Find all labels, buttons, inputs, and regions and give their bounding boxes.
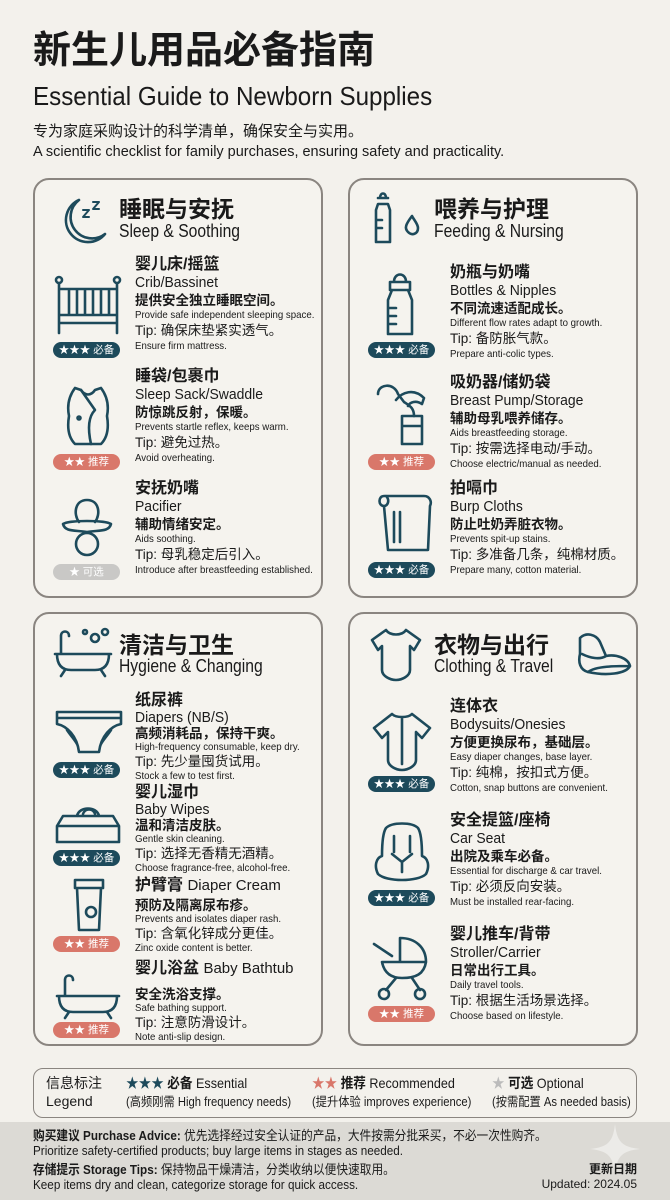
item: breast pump bbox=[368, 373, 601, 470]
panel: sleep: Tip: 母乳稳定后引入。 bbox=[135, 547, 269, 562]
panel: hygiene: Tip: 选择无香精无酒精。 bbox=[135, 846, 282, 861]
badge: bathtub: ★★ 推荐 bbox=[64, 1024, 109, 1036]
panel: feeding: ★★★ 必备 bbox=[374, 564, 429, 576]
icon: sparkle bbox=[592, 1126, 638, 1172]
panel: sleep: 安抚奶嘴 bbox=[135, 480, 199, 497]
storage tips: 存储提示 Storage Tips: 保持物品干燥清洁，分类收纳以便快速取用。 bbox=[33, 1162, 395, 1177]
panel: hygiene: 温和清洁皮肤。 bbox=[135, 818, 230, 833]
panel: hygiene: 护臂膏 Diaper Cream bbox=[135, 877, 281, 894]
legend: (高频刚需 High frequency needs) bbox=[126, 1095, 291, 1109]
panel: hygiene: Hygiene & Changing bbox=[119, 656, 263, 676]
panel: feeding bbox=[348, 178, 638, 598]
icon: onesie bbox=[370, 628, 422, 682]
panel: clothing: 安全提篮/座椅 bbox=[450, 812, 550, 829]
panel: hygiene: 婴儿浴盆 Baby Bathtub bbox=[135, 960, 294, 977]
panel: hygiene: High-frequency consumable, keep dry. bbox=[135, 741, 300, 753]
item: bathtub bbox=[56, 959, 294, 1043]
purchase advice: Prioritize safety-certified products; buy large items in stages as needed. bbox=[33, 1143, 403, 1158]
panel: hygiene: Note anti-slip design. bbox=[135, 1031, 225, 1043]
panel: clothing: ★★★ 必备 bbox=[374, 892, 429, 904]
heading: 衣物与出行 bbox=[434, 632, 549, 658]
panel: clothing: 日常出行工具。 bbox=[450, 963, 544, 978]
panel: hygiene bbox=[33, 612, 323, 1046]
panel: clothing: ★★★ 必备 bbox=[374, 778, 429, 790]
panel: hygiene: 婴儿湿巾 bbox=[135, 784, 199, 801]
panel: sleep: Introduce after breastfeeding established. bbox=[135, 564, 313, 576]
storage tips: Keep items dry and clean, categorize storage for quick access. bbox=[33, 1177, 358, 1192]
panel: hygiene: 高频消耗品，保持干爽。 bbox=[135, 726, 284, 741]
footer bbox=[0, 1122, 670, 1200]
item: crib bbox=[53, 255, 314, 358]
panel: hygiene: Diapers (NB/S) bbox=[135, 709, 229, 726]
panel: sleep: Aids soothing. bbox=[135, 533, 196, 545]
icon: bottle and drop bbox=[374, 192, 420, 244]
panel: hygiene: Safe bathing support. bbox=[135, 1002, 227, 1014]
panel: hygiene: 预防及隔离尿布疹。 bbox=[135, 898, 256, 913]
panel: feeding: Tip: 多准备几条，纯棉材质。 bbox=[450, 547, 624, 562]
panel: clothing: Tip: 必须反向安装。 bbox=[450, 879, 570, 894]
panel: feeding: Prevents spit-up stains. bbox=[450, 533, 550, 545]
panel: feeding: 辅助母乳喂养储存。 bbox=[450, 411, 572, 426]
panel: sleep: Pacifier bbox=[135, 498, 182, 515]
panel: sleep: Ensure firm mattress. bbox=[135, 340, 227, 352]
panel: hygiene: Prevents and isolates diaper rash. bbox=[135, 913, 281, 925]
legend: ★★ 推荐 Recommended bbox=[312, 1075, 455, 1091]
panel: clothing: 出院及乘车必备。 bbox=[450, 849, 558, 864]
panel: feeding: 奶瓶与奶嘴 bbox=[450, 264, 530, 281]
panel: clothing: Tip: 根据生活场景选择。 bbox=[450, 993, 597, 1008]
panel: feeding: Feeding & Nursing bbox=[434, 221, 564, 241]
panel: clothing: Cotton, snap buttons are convenient. bbox=[450, 782, 608, 794]
badge: bathtub bbox=[53, 1022, 120, 1038]
panel: clothing: Tip: 纯棉，按扣式方便。 bbox=[450, 765, 597, 780]
panel: feeding: Aids breastfeeding storage. bbox=[450, 427, 568, 439]
badge: diapers bbox=[53, 762, 120, 778]
item: diapers bbox=[56, 691, 300, 782]
legend: (按需配置 As needed basis) bbox=[492, 1095, 631, 1109]
panel: feeding: Breast Pump/Storage bbox=[450, 392, 583, 409]
panel: feeding: ★★★ 必备 bbox=[374, 344, 429, 356]
panel: sleep: Tip: 避免过热。 bbox=[135, 435, 228, 450]
panel: sleep: ★★ 推荐 bbox=[64, 456, 109, 468]
panel: feeding: Prepare anti-colic types. bbox=[450, 348, 554, 360]
badge: wipes bbox=[53, 850, 120, 866]
panel: clothing: Easy diaper changes, base layer. bbox=[450, 751, 592, 763]
panel: clothing: Choose based on lifestyle. bbox=[450, 1010, 563, 1022]
panel: sleep: Sleep Sack/Swaddle bbox=[135, 386, 263, 403]
panel: clothing: 方便更换尿布，基础层。 bbox=[450, 735, 598, 750]
item: car seat bbox=[368, 811, 602, 908]
panel: clothing: Must be installed rear-facing. bbox=[450, 896, 574, 908]
panel: sleep: Sleep & Soothing bbox=[119, 221, 240, 241]
panel: hygiene: Tip: 先少量囤货试用。 bbox=[135, 754, 269, 769]
panel: sleep: ★ 可选 bbox=[69, 566, 104, 578]
panel: clothing: 连体衣 bbox=[450, 698, 498, 715]
panel: clothing bbox=[348, 612, 638, 1046]
icon: car seat bbox=[578, 633, 632, 676]
badge: diapers: ★★★ 必备 bbox=[59, 764, 114, 776]
panel: sleep bbox=[33, 178, 323, 598]
panel: feeding: Prepare many, cotton material. bbox=[450, 564, 581, 576]
title: 新生儿用品必备指南 bbox=[33, 30, 375, 72]
intro text: 专为家庭采购设计的科学清单，确保安全与实用。 bbox=[33, 123, 363, 140]
panel: sleep: 辅助情绪安定。 bbox=[135, 517, 230, 532]
panel: sleep: 提供安全独立睡眠空间。 bbox=[135, 293, 284, 308]
updated date bbox=[542, 1162, 637, 1191]
panel: clothing: 婴儿推车/背带 bbox=[450, 926, 550, 943]
item: sleep sack bbox=[53, 367, 289, 470]
updated date: 更新日期 bbox=[589, 1162, 637, 1176]
panel: clothing: Bodysuits/Onesies bbox=[450, 716, 566, 733]
panel: hygiene: 纸尿裤 bbox=[135, 692, 183, 709]
panel: hygiene: 安全洗浴支撑。 bbox=[135, 987, 230, 1002]
legend: ★★★ 必备 Essential bbox=[126, 1075, 247, 1091]
legend: ★ 可选 Optional bbox=[492, 1075, 584, 1091]
item: bodysuits bbox=[368, 697, 608, 794]
badge: wipes: ★★★ 必备 bbox=[59, 852, 114, 864]
panel: hygiene: Stock a few to test first. bbox=[135, 770, 235, 782]
panel: feeding: 吸奶器/储奶袋 bbox=[450, 374, 550, 391]
updated date: Updated: 2024.05 bbox=[542, 1177, 637, 1191]
legend: 信息标注 bbox=[46, 1075, 102, 1091]
purchase advice bbox=[33, 1128, 547, 1158]
panel: clothing: Car Seat bbox=[450, 830, 505, 847]
panel: feeding: Burp Cloths bbox=[450, 498, 523, 515]
badge: cream bbox=[53, 936, 120, 952]
heading: 睡眠与安抚 bbox=[119, 196, 234, 222]
heading: 喂养与护理 bbox=[434, 196, 549, 222]
panel: sleep: Prevents startle reflex, keeps warm. bbox=[135, 421, 289, 433]
item: stroller bbox=[368, 925, 597, 1022]
panel: sleep: 婴儿床/摇篮 bbox=[135, 256, 219, 273]
panel: feeding: Tip: 备防胀气款。 bbox=[450, 331, 557, 346]
legend: (提升体验 improves experience) bbox=[312, 1095, 471, 1109]
panel: feeding: Tip: 按需选择电动/手动。 bbox=[450, 441, 601, 456]
item: pacifier bbox=[53, 479, 313, 580]
panel: feeding: 不同流速适配成长。 bbox=[450, 301, 572, 316]
panel: clothing: Stroller/Carrier bbox=[450, 944, 541, 961]
legend bbox=[33, 1068, 637, 1118]
panel: sleep: ★★★ 必备 bbox=[59, 344, 114, 356]
panel: clothing: Essential for discharge & car travel. bbox=[450, 865, 602, 877]
item: diaper cream bbox=[74, 876, 282, 954]
panel: sleep: 睡袋/包裹巾 bbox=[135, 368, 219, 385]
heading: 清洁与卫生 bbox=[119, 632, 234, 658]
intro text bbox=[33, 123, 504, 160]
item: bottles bbox=[368, 263, 602, 360]
panel: clothing: ★★ 推荐 bbox=[379, 1008, 424, 1020]
panel: sleep: Crib/Bassinet bbox=[135, 274, 218, 291]
panel: hygiene: Gentle skin cleaning. bbox=[135, 833, 225, 845]
panel: clothing: Daily travel tools. bbox=[450, 979, 524, 991]
panel: feeding: Different flow rates adapt to growth. bbox=[450, 317, 602, 329]
icon: moon bbox=[64, 198, 106, 244]
icon: bathtub bbox=[54, 628, 112, 678]
panel: sleep: Avoid overheating. bbox=[135, 452, 215, 464]
panel: clothing: Clothing & Travel bbox=[434, 656, 553, 676]
panel: feeding: 防止吐奶弄脏衣物。 bbox=[450, 517, 572, 532]
item: wipes bbox=[56, 783, 290, 874]
panel: hygiene: Tip: 含氧化锌成分更佳。 bbox=[135, 926, 282, 941]
panel: hygiene: Tip: 注意防滑设计。 bbox=[135, 1015, 255, 1030]
subtitle english: Essential Guide to Newborn Supplies bbox=[33, 81, 432, 111]
panel: feeding: Choose electric/manual as needed. bbox=[450, 458, 601, 470]
intro text: A scientific checklist for family purchases, ensuring safety and practicality. bbox=[33, 143, 504, 160]
legend: Legend bbox=[46, 1093, 93, 1109]
panel: sleep: 防惊跳反射，保暖。 bbox=[135, 405, 256, 420]
panel: feeding: 拍嗝巾 bbox=[450, 480, 498, 497]
item: burp cloths bbox=[368, 479, 624, 578]
panel: sleep: Provide safe independent sleeping space. bbox=[135, 309, 314, 321]
panel: feeding: Bottles & Nipples bbox=[450, 282, 556, 299]
panel: feeding: ★★ 推荐 bbox=[379, 456, 424, 468]
badge: cream: ★★ 推荐 bbox=[64, 938, 109, 950]
panel: hygiene: Baby Wipes bbox=[135, 801, 209, 818]
purchase advice: 购买建议 Purchase Advice: 优先选择经过安全认证的产品，大件按需分批采买，不必一次性购齐。 bbox=[33, 1128, 547, 1143]
panel: sleep: Tip: 确保床垫紧实透气。 bbox=[135, 323, 282, 338]
panel: hygiene: Choose fragrance-free, alcohol-free. bbox=[135, 862, 290, 874]
panel: hygiene: Zinc oxide content is better. bbox=[135, 942, 253, 954]
storage tips bbox=[33, 1162, 395, 1192]
